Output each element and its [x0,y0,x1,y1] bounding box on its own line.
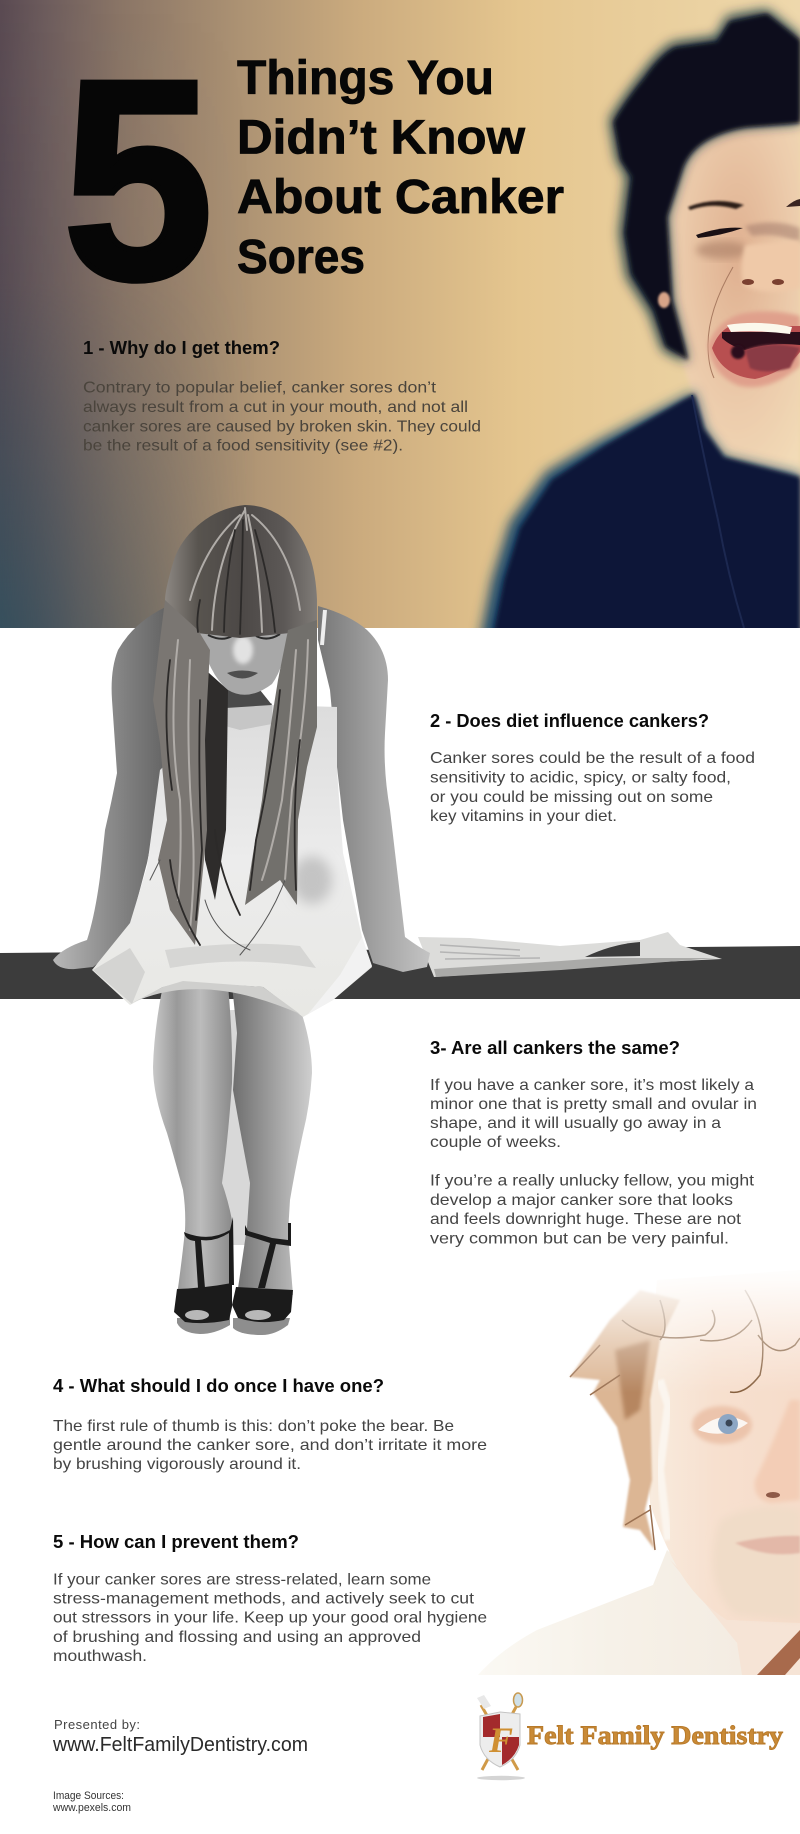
body 3 [430,1077,757,1248]
body 3: very common but can be very painful. [430,1230,729,1248]
man face and neck [669,128,798,472]
header background panel [0,0,800,628]
body 1: Contrary to popular belief, canker sores don’t [83,380,437,397]
lace neckline [225,703,272,730]
blond man skin [645,1270,800,1623]
woman legs [153,985,312,1295]
left arm [53,604,175,969]
body 4: gentle around the canker sore, and don’t irritate it more [53,1437,487,1454]
body 5 [53,1572,487,1665]
dress fold shadows [292,856,332,904]
title: Sores [237,231,365,284]
image sources [52,1790,131,1814]
logo: Felt Family Dentistry [477,1693,783,1780]
body 2: key vitamins in your diet. [430,808,617,825]
title: Didn’t Know [237,112,526,164]
heading 4: 4 - What should I do once I have one? [53,1376,384,1396]
man hair [610,10,800,362]
blond man hair [570,1290,800,1550]
icon: shield: F [488,1720,513,1760]
body 5: If your canker sores are stress-related, learn some [53,1572,431,1588]
photo: woman sitting on bench [53,505,430,1335]
heading 5: 5 - How can I prevent them? [53,1532,299,1552]
presented by: Presented by: [54,1717,140,1732]
photo: screaming man [480,10,800,640]
body 1: always result from a cut in your mouth, and not all [83,399,468,416]
hair crown and bangs [165,505,317,640]
bench [0,946,800,999]
left leg [153,985,232,1295]
body 3: and feels downright huge. These are not [430,1211,742,1228]
man shirt [480,392,800,640]
straps [184,1217,234,1288]
white lower page panel [0,628,800,1834]
blond man neck [670,1560,800,1675]
body 5: stress-management methods, and actively seek to cut [53,1591,475,1608]
fade to white [570,1270,800,1386]
section 4 text [53,1376,487,1473]
body 1: be the result of a food sensitivity (see #2). [83,438,403,454]
right leg [232,985,312,1295]
photo: blond man [470,1260,800,1675]
body 5: mouthwash. [53,1648,147,1665]
icon: shield [477,1712,525,1780]
body 4: The first rule of thumb is this: don’t poke the bear. Be [53,1418,454,1435]
dress seen between legs [222,1010,250,1245]
presented by: www.FeltFamilyDentistry.com [52,1734,308,1756]
body 1 [83,380,481,454]
heading 2: 2 - Does diet influence cankers? [430,711,709,731]
body 3: develop a major canker sore that looks [430,1192,733,1209]
man ear [658,292,670,308]
blond man stubble shade [713,1507,800,1620]
man mouth [708,311,800,387]
woman shoes [174,1217,293,1335]
newspaper [418,932,722,977]
woman neck and face [198,625,288,708]
sole [177,1316,230,1334]
man nose [708,240,800,378]
body 2 [430,750,755,825]
image sources: Image Sources: [53,1790,124,1802]
man eye and brow [688,199,800,259]
section 2 text [430,711,755,825]
body 2: or you could be missing out on some [430,789,713,806]
dress strap [322,610,325,645]
section 5 text [53,1532,487,1665]
body 5: out stressors in your life. Keep up your good oral hygiene [53,1610,487,1627]
section 3 text [430,1038,757,1248]
section 1 text [83,338,481,454]
upper [174,1283,232,1323]
title: Things You [237,52,494,105]
heading 3: 3- Are all cankers the same? [430,1038,680,1058]
blond man nose and lips [735,1400,800,1554]
body 3: minor one that is pretty small and ovular in [430,1096,757,1113]
right arm [318,606,430,972]
blond man shirt [478,1550,745,1675]
woman dress [92,703,372,1017]
body 3: If you have a canker sore, it’s most likely a [430,1077,754,1094]
body 2: Canker sores could be the result of a food [430,750,755,767]
body 4: by brushing vigorously around it. [53,1456,301,1473]
body 3: shape, and it will usually go away in a [430,1115,721,1132]
left hair bundle [153,600,210,945]
toes [185,1310,209,1320]
blond man eye [692,1406,752,1444]
earphone cord [692,395,744,628]
icon: crossed toothbrush and mirror [477,1693,522,1770]
body 5: of brushing and flossing and using an approved [53,1629,421,1646]
big number 5: 5 [63,22,213,339]
woman hair [150,505,317,955]
body 4 [53,1418,487,1473]
hair side shadow [200,665,228,900]
body 2: sensitivity to acidic, spicy, or salty food, [430,770,731,786]
logo text: Felt Family Dentistry [527,1721,783,1750]
hair streaks [150,508,308,955]
body 3: If you’re a really unlucky fellow, you might [430,1173,755,1190]
woman arms [53,604,430,972]
presented by [52,1717,308,1756]
title [237,52,564,284]
title: About Canker [237,171,564,224]
body 1: canker sores are caused by broken skin. They could [83,418,481,435]
heading 1: 1 - Why do I get them? [83,338,280,358]
lace band [165,944,316,968]
image sources: www.pexels.com [52,1802,131,1814]
right hair bundle [245,620,317,905]
body 3: couple of weeks. [430,1134,561,1151]
